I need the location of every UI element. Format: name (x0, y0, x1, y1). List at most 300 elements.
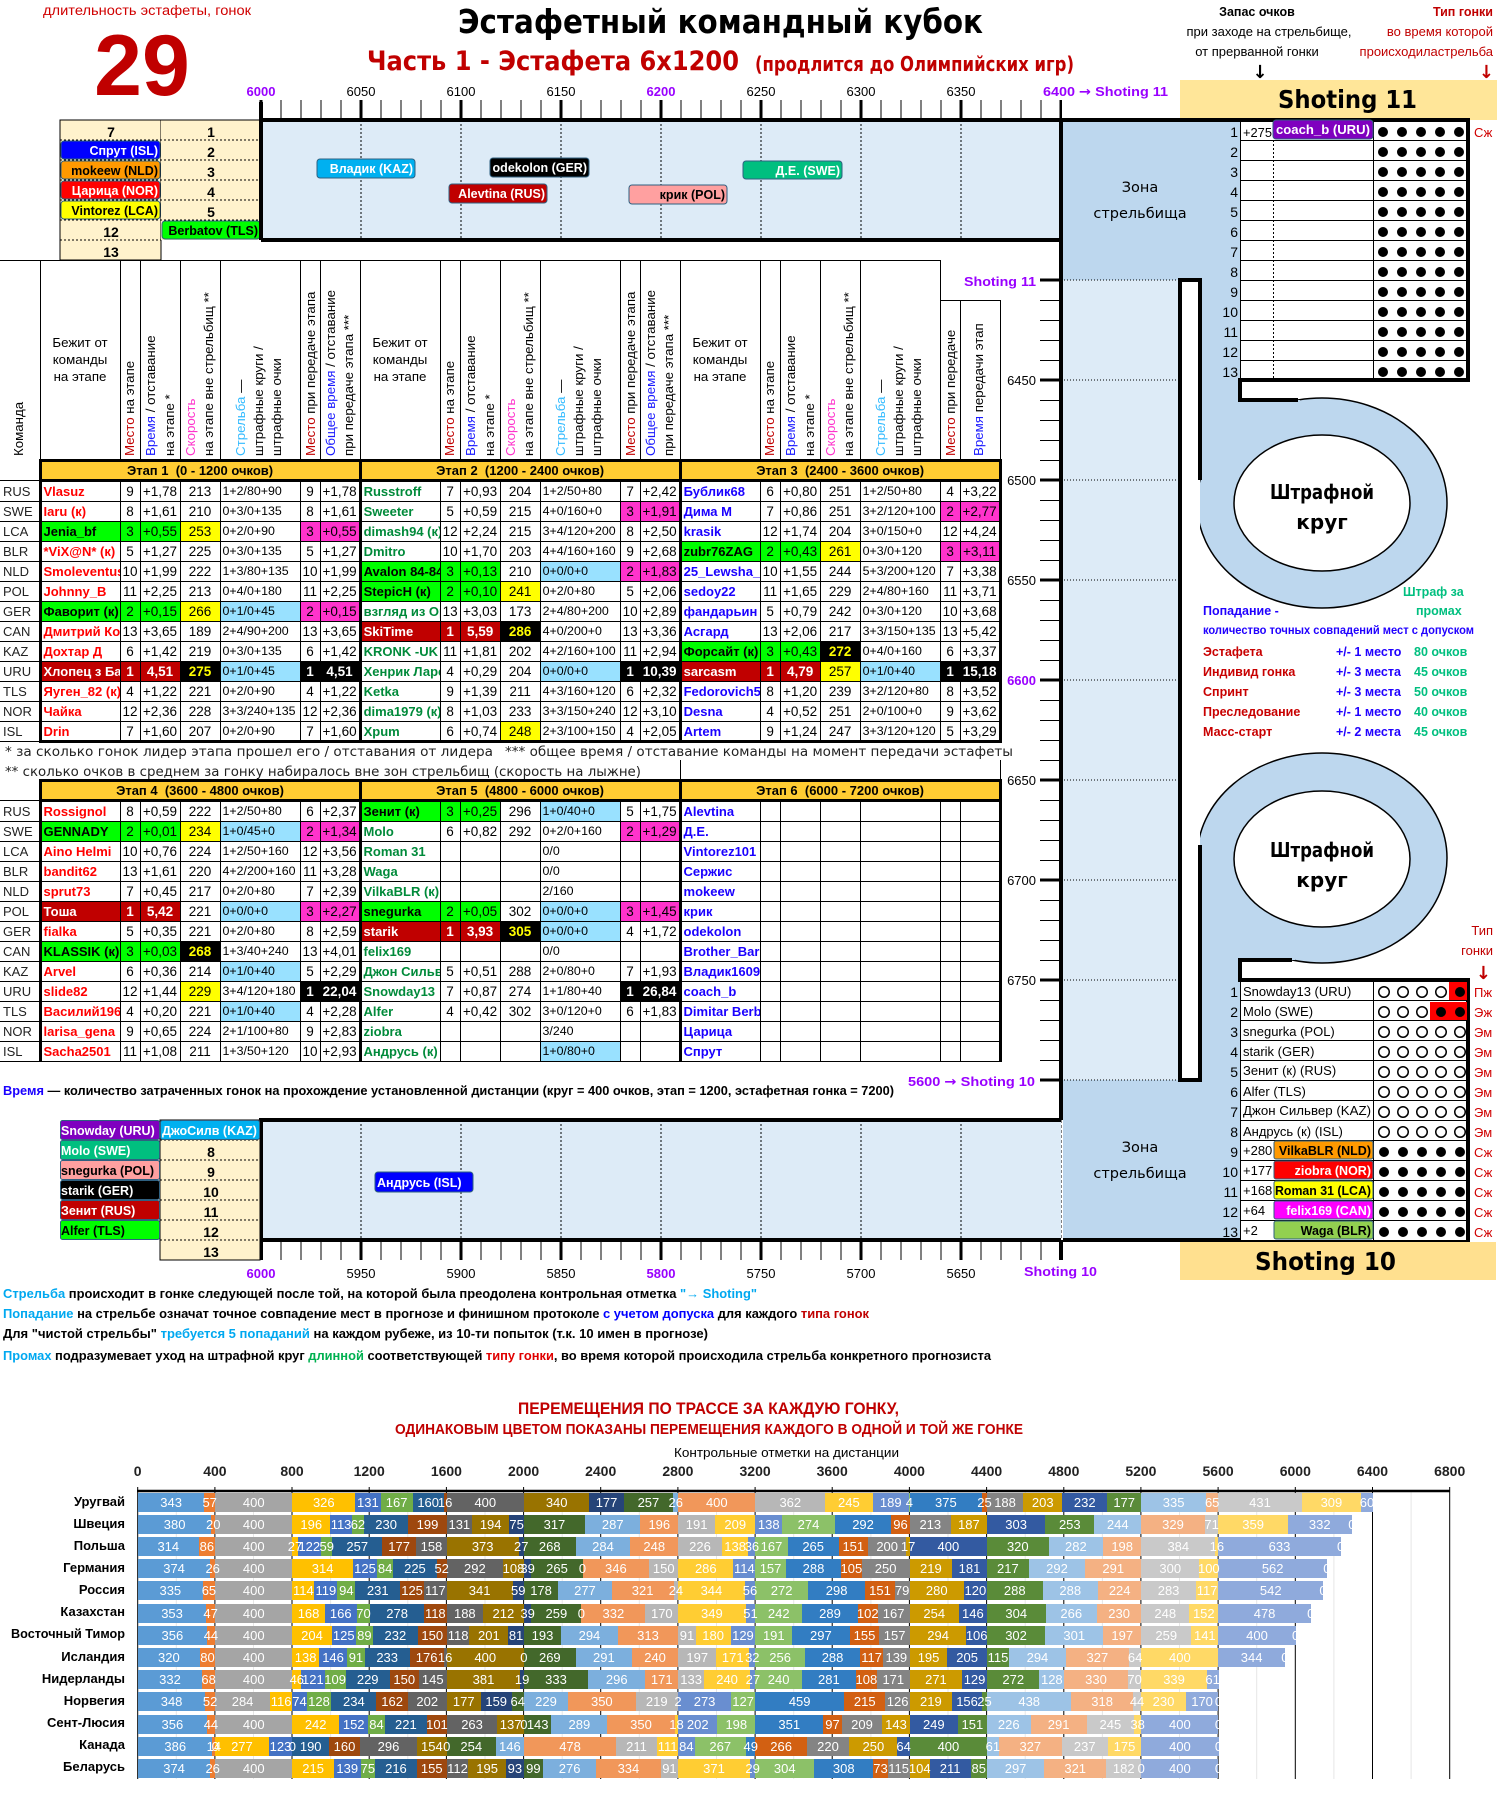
panel: shooting 11: 5 (1230, 204, 1238, 220)
bar: Нидерланды: 128 (1041, 1672, 1063, 1687)
track chips top (317, 158, 842, 204)
results table: stages 1-3: +3,37 (963, 644, 997, 659)
table column headers: stage 3: Бежит от (692, 335, 748, 350)
top-right notes: при заходе на стрельбище, (1186, 24, 1352, 39)
bar: Швеция: 62 (351, 1517, 365, 1532)
results table: stages 4-6: 222 (189, 804, 211, 819)
results table: stages 4-6: +0,82 (463, 824, 497, 839)
top ruler: 6000 (247, 84, 275, 99)
bar: Уругвай: 4 (906, 1495, 913, 1510)
results table: stages 1-3: 5 (626, 584, 634, 599)
results table: stages 1-3 (0, 459, 1002, 743)
results table: stages 4-6: 11 (303, 864, 317, 879)
table column headers: stage 2: Скорость (503, 399, 518, 456)
results table: stages 4-6: 10 (302, 1044, 318, 1059)
track frame (261, 102, 1470, 1260)
results table: stages 1-3: NLD (3, 564, 29, 579)
bar: Уругвай: 257 (638, 1495, 659, 1510)
results table: stages 1-3: KRONK -UK (364, 644, 438, 659)
results table: stages 4-6: +0,42 (463, 1004, 497, 1019)
results table: stages 4-6: +0,36 (143, 964, 177, 979)
bar: Восточный Тимор: 197 (1111, 1628, 1133, 1643)
bar: Восточный Тимор: 259 (1155, 1628, 1177, 1643)
results table: stages 1-3: +1,99 (322, 564, 357, 579)
bar: Восточный Тимор: 106 (966, 1628, 988, 1643)
results table: stages 1-3: 0+2/0+80 (543, 584, 595, 598)
bar: Канада: 478 (559, 1739, 581, 1754)
results table: stages 1-3: 10 (122, 564, 138, 579)
results table: stages 1-3: Яуген_82 (к) (44, 684, 120, 699)
bar: Швеция: 274 (798, 1517, 819, 1532)
panel: shooting 10: Сж (1474, 1205, 1493, 1220)
table column headers: stage 2: Время / отставание (463, 335, 478, 456)
bar: Нидерланды: 330 (1085, 1672, 1107, 1687)
bar: Швеция: 244 (1107, 1517, 1129, 1532)
start chips bottom: Alfer (TLS) (61, 1224, 125, 1238)
legend: scoring: +/- 2 места (1336, 725, 1402, 739)
bar: Казахстан: 152 (1193, 1606, 1215, 1621)
bar: Швеция: 303 (1005, 1517, 1027, 1532)
chart titles, axis and category labels: ОДИНАКОВЫМ ЦВЕТОМ ПОКАЗАНЫ ПЕРЕМЕЩЕНИЯ КАЖДОГО В ОДНОЙ И ТОЙ ЖЕ ГОНКЕ (395, 1420, 1023, 1438)
results table: stages 4-6: Dimitar Berb (684, 1004, 760, 1019)
results table: stages 1-3: +2,36 (322, 704, 357, 719)
bar: Польша: 633 (1269, 1539, 1290, 1554)
upper start grid: 5 (207, 204, 215, 220)
bar: Германия: 346 (605, 1561, 627, 1576)
panel: shooting 10: Сж (1474, 1185, 1493, 1200)
bar: Швеция: 196 (300, 1517, 322, 1532)
results table: stages 1-3: 215 (509, 504, 531, 519)
bar: Канада: 211 (626, 1739, 647, 1754)
bar: Нидерланды: 229 (357, 1672, 379, 1687)
results table: stages 1-3: 13 (302, 624, 318, 639)
results table: stages 1-3: 15,18 (963, 664, 997, 679)
bar: Исландия: 344 (1241, 1650, 1262, 1665)
table column headers: stage 1: Бежит от (52, 335, 108, 350)
top-right notes: ↓ (1252, 62, 1268, 83)
bar: Восточный Тимор: 157 (884, 1628, 905, 1643)
footnotes: ** сколько очков в среднем за гонку набиралось вне зон стрельбищ (скорость на лыжне) (5, 765, 641, 780)
results table: stages 1-3: 2+0/100+0 (863, 704, 922, 718)
results table: stages 4-6: +0,87 (463, 984, 497, 999)
bar: Беларусь: 216 (385, 1761, 407, 1776)
results table: stages 4-6: coach_b (684, 984, 736, 999)
legend: scoring: Индивид гонка (1203, 665, 1296, 679)
bar: Нидерланды: 171 (882, 1672, 904, 1687)
bar: Казахстан: 188 (454, 1606, 476, 1621)
results table: stages 1-3: Этап 1 (0 - 1200 очков) (127, 463, 273, 478)
panel: shooting 10: Андрусь (к) (ISL) (1243, 1124, 1343, 1139)
bar: Казахстан: 353 (161, 1606, 183, 1621)
bar: Швеция: 253 (1059, 1517, 1081, 1532)
bar: Россия: 277 (574, 1583, 596, 1598)
results table: stages 1-3: +0,74 (463, 724, 497, 738)
bar: Польша: 400 (243, 1539, 265, 1554)
table column headers: stage 2: штрафные очки (589, 358, 604, 456)
bar: Нидерланды: 339 (1163, 1672, 1185, 1687)
bar: Польша: 320 (1007, 1539, 1029, 1554)
bar: Нидерланды: 108 (856, 1672, 877, 1687)
chart titles, axis and category labels: Исландия (61, 1649, 125, 1664)
results table: stages 1-3: 0+0/0+0 (543, 564, 588, 578)
bar: Сент-Люсия: 0 (1215, 1717, 1222, 1732)
bar: Сент-Люсия: 400 (1169, 1717, 1191, 1732)
race type note: ↓ (1476, 963, 1491, 984)
bar: Сент-Люсия: 249 (923, 1717, 945, 1732)
results table: stages 1-3: 244 (829, 564, 851, 579)
results table: stages 4-6: BLR (3, 864, 28, 879)
bar: Беларусь: 104 (909, 1761, 931, 1776)
bar: Восточный Тимор: 400 (243, 1628, 265, 1643)
bar: Восточный Тимор: 81 (509, 1628, 523, 1643)
results table: stages 4-6: +2,39 (322, 884, 357, 899)
results table: stages 1-3: +3,22 (963, 484, 997, 499)
bar: Беларусь: 93 (508, 1761, 522, 1776)
results table: stages 4-6: Arvel (44, 964, 76, 979)
bar: Уругвай: 335 (1163, 1495, 1184, 1510)
panel: shooting 10: Alfer (TLS) (1243, 1084, 1306, 1099)
bar: Германия: 288 (803, 1561, 824, 1576)
panel: shooting 10: 9 (1230, 1144, 1238, 1160)
results table: stages 1-3: Асгард (684, 624, 729, 639)
bar: Сент-Люсия: 151 (962, 1717, 983, 1732)
results table: stages 1-3: 0+4/0+160 (863, 644, 922, 658)
results table: stages 1-3: +2,42 (643, 484, 677, 499)
bar: Нидерланды: 332 (159, 1672, 181, 1687)
bar: Россия: 125 (401, 1583, 423, 1598)
subtitle (367, 46, 1074, 77)
panel: shooting 10: 11 (1223, 1184, 1238, 1200)
results table: stages 4-6: LCA (3, 844, 28, 859)
results table: stages 1-3: 10,39 (643, 664, 676, 679)
results table: stages 1-3: 2+4/80+160 (863, 584, 929, 598)
results table: stages 4-6: GENNADY (44, 824, 109, 839)
bar: Канада: 400 (1169, 1739, 1191, 1754)
bar: Сент-Люсия: 242 (305, 1717, 327, 1732)
bar: Норвегия: 215 (854, 1694, 876, 1709)
bar: Исландия: 64 (1128, 1650, 1142, 1665)
bar: Нидерланды: 121 (302, 1672, 324, 1687)
results table: stages 4-6: 3 (126, 944, 134, 959)
bar: Беларусь: 0 (1138, 1761, 1145, 1776)
table column headers: stage 1: Место при передаче этапа (303, 291, 318, 456)
bar: Уругвай: 131 (357, 1495, 379, 1510)
results table: stages 1-3: Бублик68 (684, 484, 745, 499)
panel: shooting 10: Эм (1474, 1105, 1492, 1120)
zone label bottom (1093, 1140, 1187, 1182)
bar: Канада: 160 (334, 1739, 355, 1754)
top-right notes: Тип гонки (1433, 5, 1493, 19)
results table: stages 1-3: 5 (446, 504, 454, 519)
results table: stages 1-3: sedoy22 (684, 584, 736, 599)
zone label top: стрельбища (1093, 206, 1187, 222)
top-right notes (1186, 5, 1494, 83)
bar: Казахстан: 266 (1060, 1606, 1082, 1621)
bar: Уругвай: 177 (596, 1495, 617, 1510)
results table: stages 1-3: 217 (829, 624, 851, 639)
top-right notes: во время которой (1387, 24, 1493, 39)
bar: Нидерланды: 70 (1127, 1672, 1142, 1687)
results table: stages 4-6: 0+1/0+40 (222, 1004, 275, 1018)
results table: stages 4-6: 8 (126, 804, 134, 819)
results table: stages 1-3: 2 (446, 584, 454, 599)
bar: Россия: 542 (1260, 1583, 1282, 1598)
results table: stages 1-3: URU (3, 664, 31, 679)
results table: stages 1-3: 4 (946, 484, 954, 499)
upper start grid: 3 (207, 164, 215, 180)
results table: stages 1-3: Форсайт (к) (684, 644, 758, 659)
results table: stages 1-3: 251 (829, 484, 851, 499)
bar: Беларусь: 182 (1113, 1761, 1135, 1776)
results table: stages 1-3: 215 (509, 524, 531, 539)
right ruler: 6650 (1007, 773, 1036, 788)
bar: Россия: 94 (339, 1583, 354, 1598)
race count: 29 (94, 18, 190, 114)
table column headers: stage 1: штрафные очки (269, 358, 284, 456)
bar: Исландия (138, 1648, 1288, 1667)
panel: shooting 10: 3 (1230, 1024, 1238, 1040)
bar: Польша: 0 (1337, 1539, 1344, 1554)
results table: stages 1-3: 1 (626, 664, 634, 679)
results table: stages 4-6: 26,84 (643, 984, 676, 999)
results table: stages 1-3: 203 (509, 544, 531, 559)
bar: Восточный Тимор: 91 (680, 1628, 694, 1643)
results table: stages 1-3: 0+2/0+90 (222, 684, 275, 698)
stacked bar chart: 0 (1281, 1650, 1288, 1665)
results table: stages 1-3: 11 (443, 644, 457, 659)
results table: stages 1-3: 7 (946, 564, 954, 579)
bar: Россия: 117 (425, 1583, 446, 1598)
results table: stages 1-3: 0+1/0+40 (863, 664, 915, 678)
results table: stages 4-6: Сержис (684, 864, 732, 879)
bar: Сент-Люсия: 245 (1099, 1717, 1121, 1732)
bar: Канада: 277 (231, 1739, 253, 1754)
top-right notes: Запас очков (1219, 5, 1295, 19)
bar: Россия: 117 (1197, 1583, 1218, 1598)
upper start grid: 13 (103, 244, 119, 260)
bar: Россия: 341 (469, 1583, 490, 1598)
results table: stages 1-3: 7 (306, 724, 314, 738)
table column headers: stage 1: штрафные круги / (251, 346, 266, 456)
results table: stages 1-3: 7 (126, 724, 134, 738)
results table: stages 4-6: +2,59 (322, 924, 357, 939)
top ruler: 6050 (347, 84, 375, 99)
results table: stages 1-3: 251 (829, 504, 851, 519)
legend: scoring: +/- 1 место (1336, 645, 1402, 659)
bar: Исландия: 291 (593, 1650, 615, 1665)
bar: Россия: 288 (1059, 1583, 1081, 1598)
results table: stages 1-3: 8 (946, 684, 954, 699)
results table: stages 4-6: 4 (446, 1004, 454, 1019)
lower ruler: 5650 (947, 1266, 975, 1281)
bar: Восточный Тимор: 155 (854, 1628, 875, 1643)
table column headers: stage 3 (692, 292, 986, 456)
bar: Канада: 49 (744, 1739, 758, 1754)
upper start grid: 2 (207, 144, 215, 160)
right ruler: 6450 (1007, 373, 1036, 388)
results table: stages 1-3: RUS (3, 484, 30, 498)
bar: Исландия: 138 (295, 1650, 316, 1665)
bar: Сент-Люсия: 291 (1048, 1717, 1069, 1732)
results table: stages 1-3: 8 (126, 504, 134, 519)
bar: Россия: 65 (202, 1583, 216, 1598)
bar: Восточный Тимор: 356 (161, 1628, 183, 1643)
results table: stages 1-3: GER (3, 604, 31, 619)
bar: Канада: 400 (938, 1739, 959, 1754)
results table: stages 1-3: +1,65 (783, 584, 817, 599)
panel: shooting 10: 6 (1230, 1084, 1238, 1100)
shooting rules text: Для "чистой стрельбы" требуется 5 попаданий на каждом рубеже, из 10-ти попыток (т.к. 10 имен в прогнозе) (3, 1327, 708, 1341)
bar: Нидерланды: 129 (964, 1672, 985, 1687)
bar: Германия: 400 (243, 1561, 265, 1576)
results table: stages 1-3: +1,78 (143, 484, 177, 499)
bar: Россия: 344 (701, 1583, 722, 1598)
bar: Канада: 267 (709, 1739, 731, 1754)
track chips top: крик (POL) (660, 188, 725, 202)
bar: Уругвай: 400 (243, 1495, 265, 1510)
results table: stages 1-3: +1,22 (322, 684, 357, 699)
lower start grid: 8 (207, 1144, 215, 1160)
bar: Беларусь: 115 (888, 1761, 909, 1776)
results table: stages 1-3: StepicH (к) (364, 584, 431, 599)
chart titles, axis and category labels: 4000 (894, 1463, 925, 1479)
bar: Швеция: 131 (448, 1517, 470, 1532)
results table: stages 4-6: POL (3, 904, 29, 919)
top ruler: 6100 (447, 84, 475, 99)
zone label top (1093, 180, 1187, 222)
legend: scoring: Штраф за (1403, 585, 1465, 599)
bar: Канада: 111 (658, 1739, 677, 1754)
chart titles, axis and category labels: Нидерланды (42, 1671, 125, 1686)
results table: stages 4-6: felix169 (364, 944, 411, 959)
right ruler: 6500 (1007, 473, 1036, 488)
bar: Уругвай: 25 (977, 1495, 992, 1510)
legend: scoring: Попадание - (1203, 604, 1279, 618)
bar: Восточный Тимор: 294 (927, 1628, 949, 1643)
bar: Уругвай: 309 (1321, 1495, 1342, 1510)
results table: stages 1-3: +3,11 (963, 544, 996, 559)
results table: stages 1-3: 0+3/0+135 (222, 504, 282, 518)
bar: Германия: 314 (312, 1561, 333, 1576)
results table: stages 4-6: Sacha2501 (44, 1044, 111, 1059)
bar: Польша: 265 (802, 1539, 824, 1554)
panel: shooting 10: Эм (1474, 1065, 1492, 1080)
results table: stages 1-3: krasik (684, 524, 721, 539)
results table: stages 4-6: 217 (189, 884, 211, 899)
chart titles, axis and category labels: Сент-Люсия (47, 1715, 125, 1730)
results table: stages 1-3: +0,10 (463, 584, 497, 599)
results table: stages 4-6: NLD (3, 884, 29, 899)
race count (43, 3, 251, 114)
bar: Исландия: 80 (200, 1650, 215, 1665)
bar: Беларусь: 73 (873, 1761, 888, 1776)
bar: Германия: 181 (959, 1561, 980, 1576)
results table: stages 1-3: 9 (946, 704, 954, 719)
chart titles, axis and category labels: Канада (79, 1737, 126, 1752)
results table: stages 1-3: 0+3/0+120 (863, 604, 922, 618)
bar: Сент-Люсия: 202 (687, 1717, 709, 1732)
results table: stages 1-3: +0,93 (463, 484, 497, 499)
panel: shooting 11: 3 (1230, 164, 1238, 180)
bar: Норвегия: 126 (887, 1694, 908, 1709)
bar: Норвегия: 219 (646, 1694, 668, 1709)
bar: Казахстан: 168 (298, 1606, 319, 1621)
bar: Россия (138, 1581, 1327, 1600)
table column headers: stage 3: Место на этапе (762, 361, 777, 456)
results table: stages 4-6: mokeew (684, 884, 735, 899)
table column headers: stage 2: Место на этапе (442, 361, 457, 456)
results table: stages 4-6: 1+3/40+240 (222, 944, 289, 958)
results table: stages 4-6: NOR (3, 1024, 32, 1039)
bar: Уругвай: 400 (474, 1495, 496, 1510)
results table: stages 1-3: 9 (766, 724, 774, 738)
table column headers: stage 1: Скорость (183, 399, 198, 456)
results table: stages 1-3: +0,55 (322, 524, 357, 539)
results table: stages 4-6: Этап 5 (4800 - 6000 очков) (436, 783, 604, 798)
bar: Беларусь: 29 (745, 1761, 760, 1776)
track chip bottom: Андрусь (ISL) (377, 1176, 462, 1190)
bar: Норвегия: 128 (308, 1694, 330, 1709)
lower ruler: 5900 (447, 1266, 475, 1281)
results table: stages 1-3: 2 (946, 504, 954, 519)
bar: Россия: 178 (530, 1583, 552, 1598)
bar: Россия: 151 (869, 1583, 891, 1598)
results table: stages 4-6: 10 (122, 844, 138, 859)
results table: stages 4-6: +3,28 (322, 864, 357, 879)
results table: stages 4-6: 1 (126, 904, 134, 919)
results table: stages 1-3: +0,59 (463, 504, 497, 519)
bar: Исландия: 195 (918, 1650, 939, 1665)
upper start grid: 12 (103, 224, 119, 240)
start chips top: mokeew (NLD) (71, 164, 158, 178)
results table: stages 4-6: +0,65 (143, 1024, 177, 1039)
results table: stages 1-3: +0,15 (322, 604, 357, 619)
bar: Швеция: 317 (544, 1517, 565, 1532)
results table: stages 1-3: +3,36 (643, 624, 677, 639)
results table: stages 1-3: Xpum (364, 724, 400, 738)
results table: stages 1-3: 242 (829, 604, 851, 619)
bar: Швеция: 287 (602, 1517, 624, 1532)
top ruler: 6300 (847, 84, 875, 99)
table column headers: stage 3: Скорость (823, 399, 838, 456)
panel: shooting 10: Snowday13 (URU) (1243, 984, 1351, 999)
bar: Норвегия: 229 (535, 1694, 557, 1709)
zone label top: Зона (1122, 180, 1158, 196)
bar: Германия: 292 (1046, 1561, 1068, 1576)
legend: scoring: Масс-старт (1203, 725, 1272, 739)
bar: Восточный Тимор (138, 1626, 1299, 1645)
bar: Уругвай: 203 (1032, 1495, 1054, 1510)
bar: Казахстан: 304 (1005, 1606, 1027, 1621)
results table: stages 1-3: CAN (3, 624, 30, 639)
lower ruler (247, 1250, 1097, 1281)
results table: stages 1-3: 207 (189, 724, 211, 738)
results table: stages 1-3: 3+0/150+0 (863, 524, 922, 538)
bar: Норвегия: 230 (1153, 1694, 1174, 1709)
start chips top (61, 141, 260, 239)
results table: stages 1-3: 3+4/120+200 (543, 524, 616, 538)
panel: shooting 11: 6 (1230, 224, 1238, 240)
table column headers: stage 2: Стрельба — (553, 379, 568, 456)
results table: stages 4-6: 305 (509, 924, 531, 939)
bar: Нидерланды (138, 1670, 1220, 1689)
penalty loop 1 (1197, 280, 1447, 608)
results table: stages 1-3: 10 (302, 564, 318, 579)
panel: shooting 10: Roman 31 (LCA) (1275, 1184, 1371, 1198)
results table: stages 1-3: 248 (509, 724, 531, 738)
chart titles, axis and category labels: Германия (63, 1560, 125, 1575)
bar: Нидерланды: 27 (746, 1672, 760, 1687)
